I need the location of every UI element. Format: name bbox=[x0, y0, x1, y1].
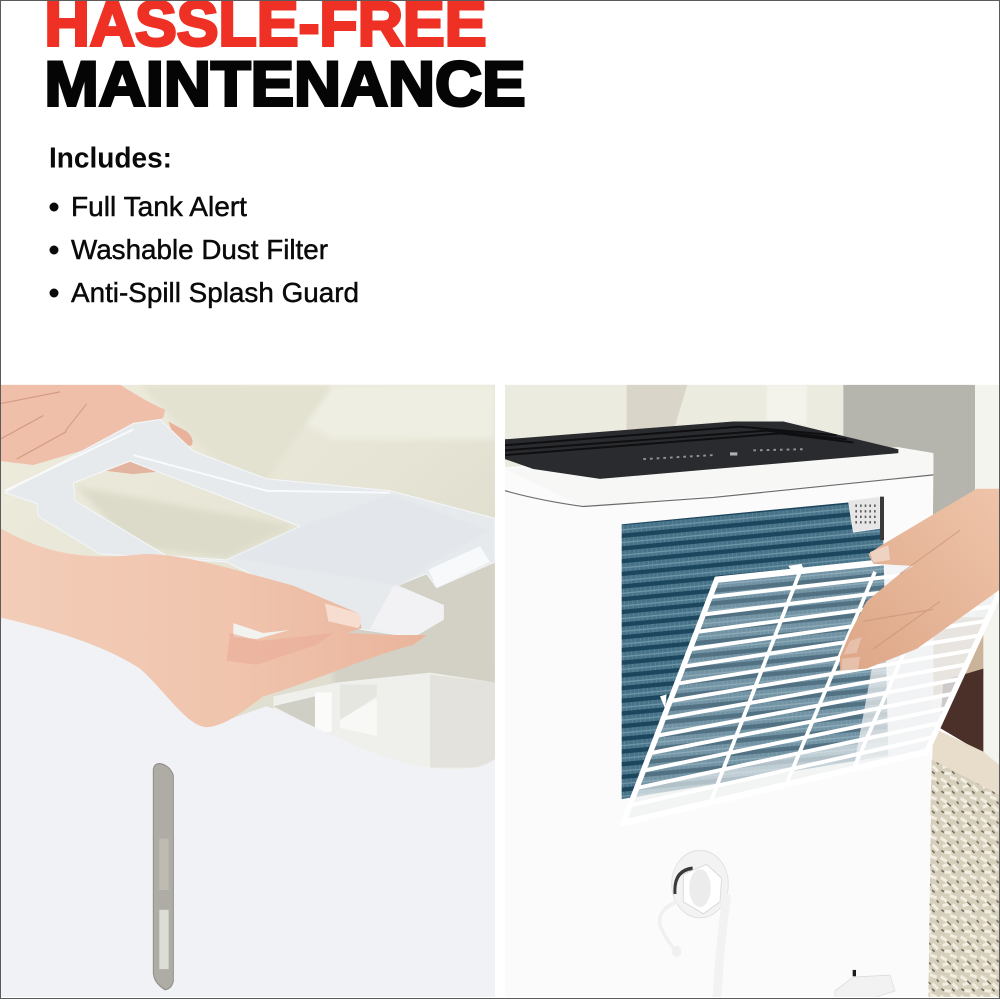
room background bbox=[505, 385, 1000, 1000]
evaporator coil bbox=[622, 499, 888, 799]
dehumidifier body bbox=[505, 447, 933, 1000]
drain port bbox=[660, 851, 728, 1000]
dust filter bbox=[630, 560, 999, 798]
splash guard bbox=[5, 420, 495, 637]
list heading: Includes: bbox=[49, 142, 172, 174]
water level window bbox=[153, 764, 173, 990]
list item: washable dust filter: Washable Dust Filter bbox=[71, 234, 328, 265]
feature list bbox=[49, 142, 359, 308]
panel: removing dust filter from dehumidifier bbox=[505, 385, 1000, 1000]
panel: removing splash guard from water tank bbox=[0, 385, 495, 1000]
title line: maintenance: MAINTENANCE bbox=[44, 50, 526, 120]
control panel top bbox=[505, 422, 898, 479]
hand bbox=[840, 489, 1000, 671]
title bbox=[44, 0, 526, 120]
sensor box bbox=[848, 497, 884, 540]
tank interior bbox=[273, 673, 495, 775]
hand: upper bbox=[0, 385, 193, 474]
list item: full tank alert: Full Tank Alert bbox=[71, 191, 247, 222]
blurred wall background bbox=[1, 384, 495, 727]
lower cord connector bbox=[835, 970, 895, 1000]
list item: anti-spill splash guard: Anti-Spill Splash Guard bbox=[71, 277, 359, 308]
hand: lower with arm bbox=[0, 528, 427, 727]
tank body bbox=[0, 617, 495, 1000]
